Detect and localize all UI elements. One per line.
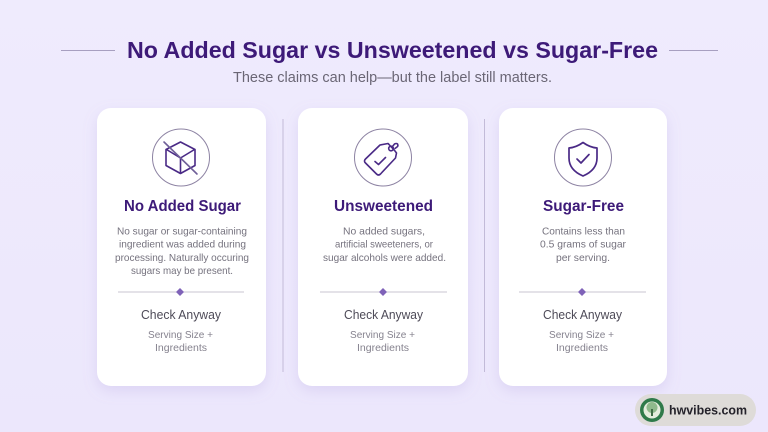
diamond marker (578, 288, 586, 296)
panel: unsweetened (298, 108, 468, 386)
description: ingredient was added during (119, 238, 246, 250)
title: No Added Sugar vs Unsweetened vs Sugar-Free (127, 37, 658, 63)
check anyway: Serving Size + (148, 329, 213, 341)
icon: tree logo (640, 398, 664, 422)
check anyway: Check Anyway (543, 308, 623, 322)
diamond marker (379, 288, 387, 296)
check anyway: Check Anyway (141, 308, 222, 322)
check anyway: Ingredients (357, 342, 409, 354)
check anyway: Ingredients (155, 342, 207, 354)
description: No added sugars, (343, 226, 425, 238)
check anyway: Serving Size + (350, 329, 415, 341)
description: sugar alcohols were added. (323, 252, 446, 264)
description (115, 226, 249, 277)
panel: no added sugar (97, 108, 266, 386)
description: sugars may be present. (131, 265, 233, 277)
heading: Unsweetened (334, 198, 433, 215)
check anyway: Serving Size + (549, 329, 614, 341)
description: Contains less than (542, 226, 625, 238)
subtitle: These claims can help—but the label still matters. (233, 70, 552, 86)
check anyway: Ingredients (556, 342, 608, 354)
icon: check shield (554, 129, 612, 186)
heading: No Added Sugar (124, 198, 241, 215)
description (323, 226, 446, 264)
badge: hwvibes.com: hwvibes.com (669, 402, 747, 418)
description: No sugar or sugar-containing (117, 226, 247, 238)
description: 0.5 grams of sugar (540, 238, 626, 250)
description: per serving. (556, 252, 610, 264)
diamond marker (176, 288, 184, 296)
description: artificial sweeteners, or (335, 238, 433, 250)
description: processing. Naturally occuring (115, 252, 249, 264)
icon: crossed-out sugar cube (152, 129, 210, 186)
badge: hwvibes.com (635, 394, 756, 426)
check anyway: Check Anyway (344, 308, 424, 322)
check anyway (543, 308, 623, 354)
icon: check tag (354, 129, 412, 186)
check anyway (344, 308, 424, 354)
heading: Sugar-Free (543, 198, 624, 215)
description (540, 226, 626, 264)
panel: sugar-free (499, 108, 667, 386)
check anyway (141, 308, 222, 354)
